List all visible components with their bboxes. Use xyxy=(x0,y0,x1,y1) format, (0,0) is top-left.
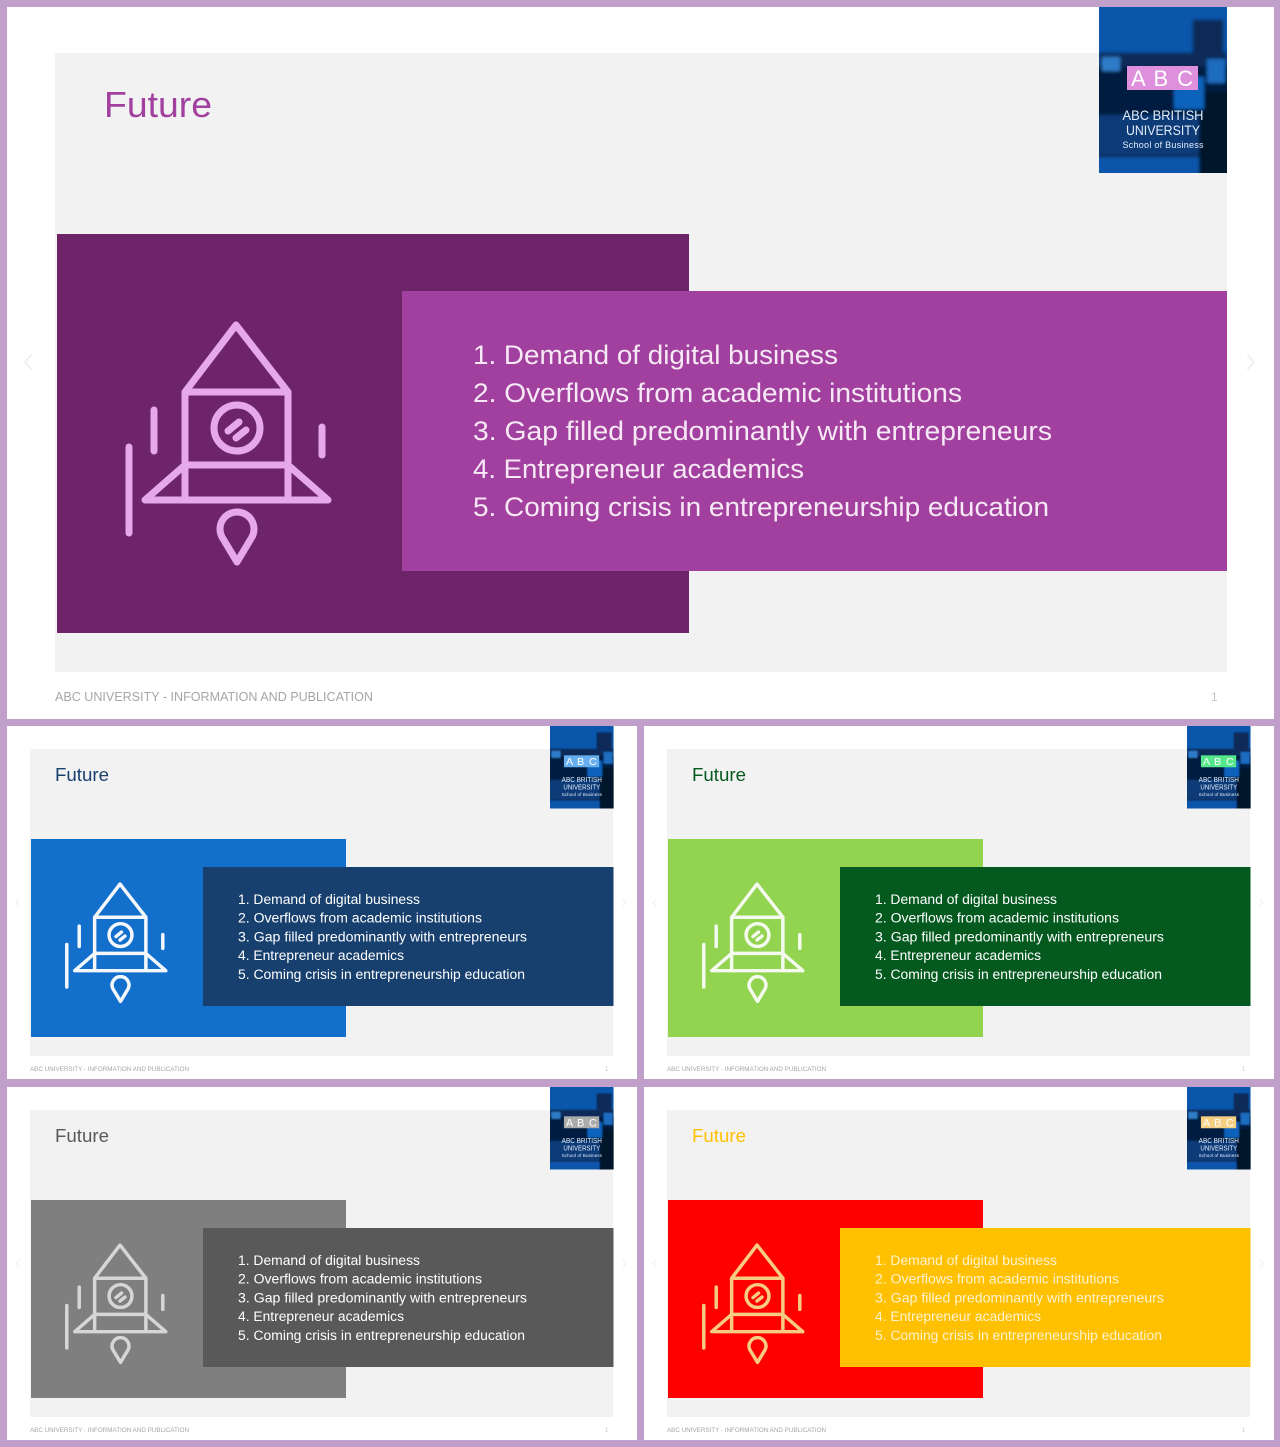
text block: list of five points xyxy=(875,1253,1164,1343)
page number: 1 xyxy=(1242,1428,1246,1434)
text block: list of five points: 1. Demand of digital business xyxy=(238,1253,420,1268)
title: Future: Future xyxy=(692,1126,746,1146)
panel: icon background xyxy=(668,839,983,1037)
page number: 1 xyxy=(1242,1067,1246,1073)
icon: rocket xyxy=(704,1245,803,1362)
logo: ABC British University: ABC BRITISH xyxy=(1122,107,1204,123)
icon: rocket xyxy=(129,325,328,562)
text block: list of five points: 3. Gap filled predominantly with entrepreneurs xyxy=(238,930,527,944)
panel: list background xyxy=(840,867,1250,1006)
logo: ABC British University: School of Business xyxy=(1199,1153,1240,1158)
footer: ABC UNIVERSITY - INFORMATION AND PUBLICATION xyxy=(667,1066,826,1073)
logo: ABC British University: A B C xyxy=(1203,1117,1234,1129)
text block: list of five points: 1. Demand of digital business xyxy=(875,1253,1057,1268)
title: Future: Future xyxy=(55,765,109,785)
footer: ABC UNIVERSITY - INFORMATION AND PUBLICATION xyxy=(30,1427,189,1434)
arrow: previous slide xyxy=(653,1260,656,1267)
panel: list background xyxy=(203,1228,614,1367)
text block: list of five points: 4. Entrepreneur academics xyxy=(473,454,804,484)
text block: list of five points xyxy=(238,892,527,982)
logo: ABC British University: A B C xyxy=(566,1117,597,1129)
text block: list of five points: 3. Gap filled predominantly with entrepreneurs xyxy=(875,1290,1164,1306)
panel: list background xyxy=(203,867,614,1006)
logo: ABC British University xyxy=(548,726,616,811)
logo: ABC British University: School of Business xyxy=(1199,792,1240,797)
text block: list of five points: 3. Gap filled predominantly with entrepreneurs xyxy=(473,416,1052,446)
text block: list of five points: 4. Entrepreneur academics xyxy=(238,1309,404,1324)
logo: ABC British University: UNIVERSITY xyxy=(563,785,601,792)
text block: list of five points: 2. Overflows from academic institutions xyxy=(875,910,1119,926)
logo: ABC British University: A B C xyxy=(1203,756,1234,768)
text block: list of five points: 2. Overflows from academic institutions xyxy=(238,1272,482,1286)
footer: ABC UNIVERSITY - INFORMATION AND PUBLICATION xyxy=(55,689,373,704)
icon: rocket xyxy=(67,884,166,1001)
page number: 1 xyxy=(605,1428,609,1434)
slide: red and yellow xyxy=(644,1087,1274,1440)
logo: ABC British University: A B C xyxy=(1131,66,1193,91)
text block: list of five points: 5. Coming crisis in entrepreneurship education xyxy=(238,1328,525,1343)
logo: ABC British University: UNIVERSITY xyxy=(1200,785,1238,792)
arrow: previous slide xyxy=(16,899,19,906)
panel: list background xyxy=(840,1228,1250,1367)
slide: blue xyxy=(7,726,637,1079)
arrow: previous slide xyxy=(25,355,31,369)
logo: ABC British University: School of Business xyxy=(1122,140,1204,150)
logo: ABC British University: UNIVERSITY xyxy=(1126,122,1201,138)
icon: rocket xyxy=(67,1245,166,1362)
text block: list of five points: 1. Demand of digital business xyxy=(473,340,838,370)
logo: ABC British University: ABC BRITISH xyxy=(1199,1138,1239,1145)
logo: ABC British University xyxy=(1185,1087,1253,1172)
slide: grey xyxy=(7,1087,637,1440)
text block: list of five points: 5. Coming crisis in entrepreneurship education xyxy=(875,967,1162,982)
arrow: next slide xyxy=(1248,355,1254,369)
text block: list of five points xyxy=(473,340,1052,522)
title: Future: Future xyxy=(104,84,212,125)
text block: list of five points: 4. Entrepreneur academics xyxy=(238,948,404,963)
text block: list of five points xyxy=(238,1253,527,1343)
text block: list of five points xyxy=(875,892,1164,982)
slide: green xyxy=(644,726,1274,1079)
logo: ABC British University xyxy=(1094,7,1232,178)
arrow: next slide xyxy=(1260,899,1263,906)
text block: list of five points: 5. Coming crisis in entrepreneurship education xyxy=(473,492,1049,522)
logo: ABC British University: School of Business xyxy=(562,792,603,797)
text block: list of five points: 4. Entrepreneur academics xyxy=(875,948,1041,963)
logo: ABC British University: UNIVERSITY xyxy=(563,1146,601,1153)
arrow: previous slide xyxy=(653,899,656,906)
text block: list of five points: 3. Gap filled predominantly with entrepreneurs xyxy=(238,1290,527,1306)
text block: list of five points: 1. Demand of digital business xyxy=(875,892,1057,907)
panel: icon background xyxy=(668,1200,983,1398)
text block: list of five points: 5. Coming crisis in entrepreneurship education xyxy=(875,1328,1162,1343)
text block: list of five points: 3. Gap filled predominantly with entrepreneurs xyxy=(875,930,1164,944)
title: Future: Future xyxy=(692,765,746,785)
text block: list of five points: 4. Entrepreneur academics xyxy=(875,1309,1041,1324)
logo: ABC British University: A B C xyxy=(566,756,597,768)
logo: ABC British University: UNIVERSITY xyxy=(1200,1146,1238,1153)
logo: ABC British University xyxy=(548,1087,616,1172)
slide: purple (main) xyxy=(7,7,1274,719)
page number: 1 xyxy=(605,1067,609,1073)
arrow: next slide xyxy=(1260,1260,1263,1267)
logo: ABC British University xyxy=(1185,726,1253,811)
page number: 1 xyxy=(1211,690,1218,704)
footer: ABC UNIVERSITY - INFORMATION AND PUBLICATION xyxy=(30,1066,189,1073)
panel: icon background xyxy=(31,839,346,1037)
text block: list of five points: 2. Overflows from academic institutions xyxy=(238,910,482,926)
logo: ABC British University: ABC BRITISH xyxy=(1199,777,1239,784)
arrow: previous slide xyxy=(16,1260,19,1267)
text block: list of five points: 2. Overflows from academic institutions xyxy=(473,378,962,408)
text block: list of five points: 5. Coming crisis in entrepreneurship education xyxy=(238,967,525,982)
panel: list background xyxy=(402,291,1227,571)
logo: ABC British University: ABC BRITISH xyxy=(562,1138,602,1145)
logo: ABC British University: School of Business xyxy=(562,1153,603,1158)
footer: ABC UNIVERSITY - INFORMATION AND PUBLICATION xyxy=(667,1427,826,1434)
arrow: next slide xyxy=(623,899,626,906)
panel: icon background xyxy=(57,234,689,633)
logo: ABC British University: ABC BRITISH xyxy=(562,777,602,784)
arrow: next slide xyxy=(623,1260,626,1267)
title: Future: Future xyxy=(55,1126,109,1146)
icon: rocket xyxy=(704,884,803,1001)
text block: list of five points: 2. Overflows from academic institutions xyxy=(875,1272,1119,1286)
text block: list of five points: 1. Demand of digital business xyxy=(238,892,420,907)
panel: icon background xyxy=(31,1200,346,1398)
